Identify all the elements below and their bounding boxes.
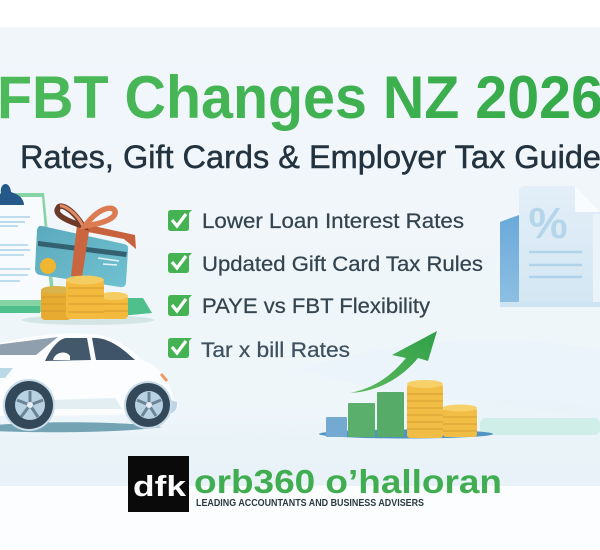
illustration: tax document with percent sign: %: [528, 199, 568, 248]
logo mark: dfk black square: dfk: [133, 471, 187, 503]
logo wordmark: orb360 o’halloran: [194, 463, 502, 500]
item: paye vs fbt flexibility: PAYE vs FBT Flexibility: [202, 295, 431, 318]
illustration: growth bars, coins and arrow: [319, 331, 493, 438]
illustration: white car: [0, 333, 178, 432]
illustration: gold coin stacks: [41, 276, 128, 320]
item: tar x bill rates: Tar x bill Rates: [201, 339, 350, 362]
logo mark: dfk black square: [128, 456, 189, 512]
mint base panel: [480, 418, 600, 435]
subtitle: Rates, Gift Cards & Employer Tax Guide: [20, 139, 600, 175]
item: updated gift card tax rules: Updated Gift Card Tax Rules: [202, 253, 483, 276]
logo tagline: LEADING ACCOUNTANTS AND BUSINESS ADVISERS: [196, 497, 424, 509]
illustration: gift card with ribbon: [35, 206, 136, 287]
illustration: clipboard: [0, 184, 154, 325]
checklist: [168, 210, 483, 362]
illustration: tax document with percent sign: [500, 186, 600, 307]
logo: dfk orb360 o'halloran: [128, 456, 502, 512]
item: lower loan interest rates: Lower Loan Interest Rates: [202, 210, 464, 233]
